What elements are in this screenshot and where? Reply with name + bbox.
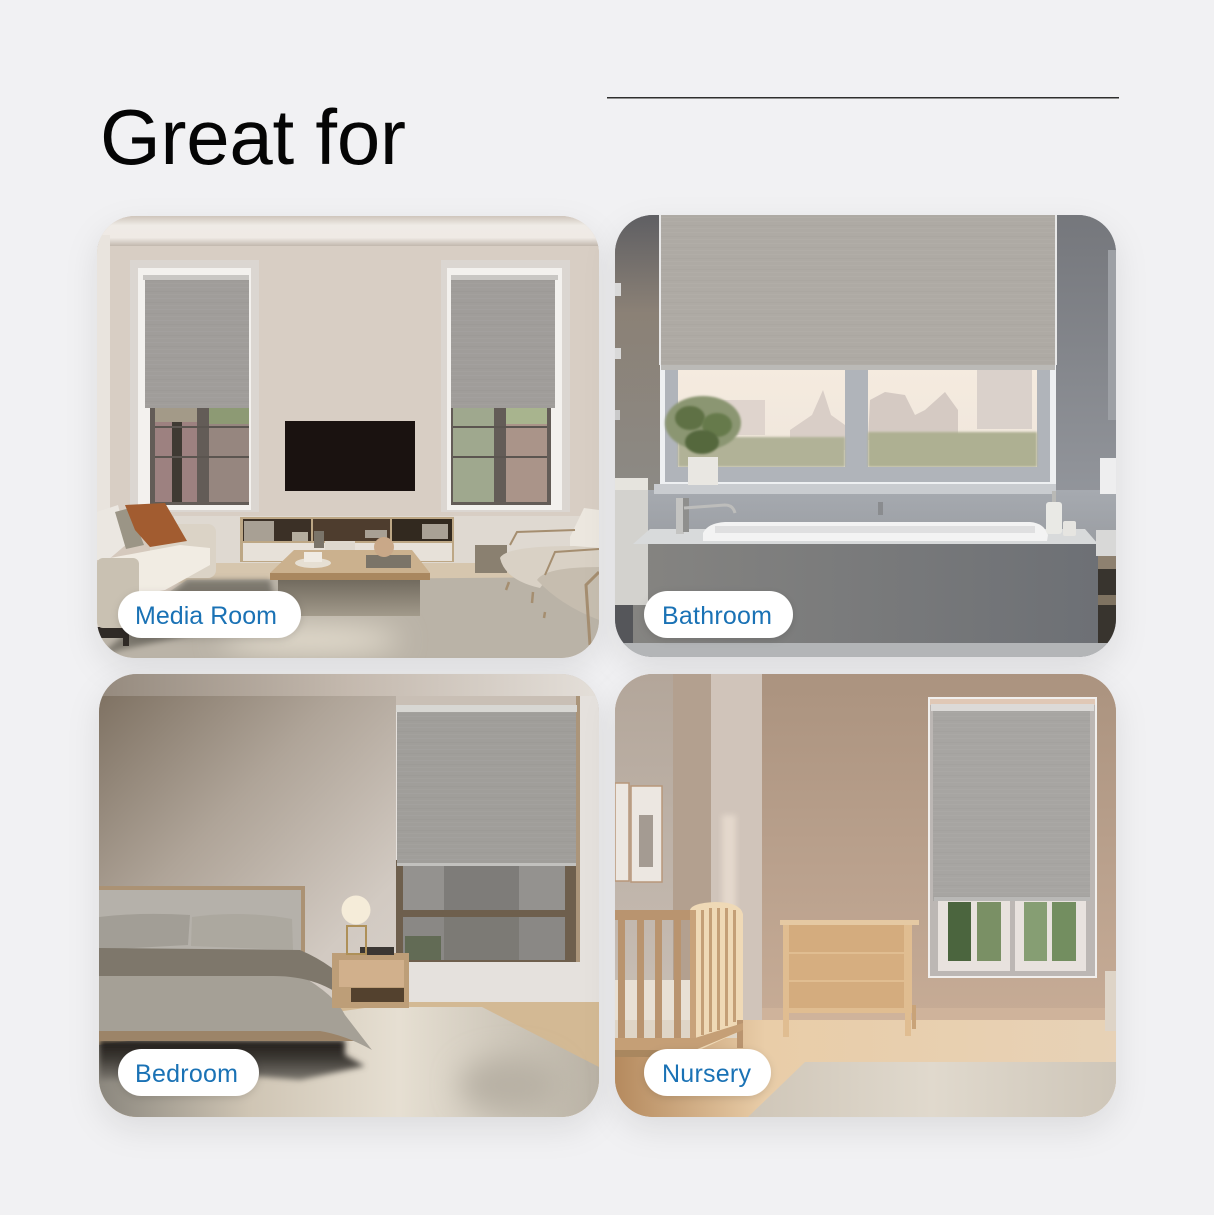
side shelf [1096, 250, 1116, 643]
coffee table [270, 531, 430, 616]
armchairs [500, 508, 599, 645]
right window [441, 260, 570, 512]
left wall [615, 215, 660, 495]
title: Great for [100, 93, 406, 181]
label: nursery: Nursery [662, 1060, 752, 1088]
wall [762, 674, 1116, 1024]
label: media room [118, 591, 301, 638]
cabinet [615, 478, 648, 645]
blanket [99, 948, 355, 1003]
label: nursery [644, 1049, 771, 1096]
soap bottles [1046, 491, 1076, 536]
rug [97, 577, 599, 658]
pillows [99, 914, 293, 950]
window trim [576, 696, 580, 962]
header rule [607, 97, 1119, 98]
panel: bathroom [615, 215, 1116, 657]
wall cabinets [174, 516, 580, 565]
panel: nursery [615, 674, 1116, 1117]
lamp [342, 896, 370, 954]
ceiling [99, 674, 599, 696]
bed frame [99, 1031, 355, 1041]
right wall [1056, 215, 1116, 495]
window frame [396, 860, 576, 962]
bathtub [703, 522, 1048, 541]
bin [1105, 971, 1116, 1031]
television [285, 421, 415, 491]
window [928, 697, 1097, 978]
rug shade [460, 1057, 560, 1113]
window view [403, 866, 565, 960]
stacked books [475, 545, 507, 573]
wall shelf hooks [615, 283, 621, 420]
rug [748, 1062, 1116, 1117]
left window [130, 260, 259, 512]
potted plant [665, 396, 741, 485]
label: bathroom: Bathroom [662, 602, 772, 630]
headboard [99, 886, 305, 952]
crib [615, 902, 743, 1057]
faucet [676, 498, 883, 534]
label: bedroom [118, 1049, 259, 1096]
side wall [97, 235, 110, 515]
dresser [780, 920, 919, 1037]
panel: bedroom [99, 674, 599, 1117]
roller shade [396, 705, 577, 866]
label: bathroom [644, 591, 793, 638]
tub deck [633, 529, 1098, 544]
column [673, 674, 762, 1024]
label: bedroom: Bedroom [135, 1060, 238, 1088]
window [654, 365, 1056, 494]
roller shade [659, 215, 1057, 370]
rug light patch [220, 628, 400, 652]
nightstand [332, 947, 409, 1008]
duvet [99, 975, 372, 1050]
baseboard [762, 1008, 1116, 1020]
back wall [110, 246, 599, 250]
label: media room: Media Room [135, 602, 277, 630]
rug [99, 1007, 599, 1117]
floor [615, 643, 1116, 657]
media console [240, 517, 454, 562]
lower wall [648, 490, 1116, 542]
floor [178, 563, 514, 583]
under-bed shadow [99, 1040, 365, 1080]
wall [99, 696, 396, 1006]
wall art [615, 783, 662, 882]
left wall [615, 674, 673, 1024]
roller shade [931, 704, 1094, 901]
rug shadow [97, 580, 278, 658]
floor [615, 1020, 1116, 1117]
alcove wall [396, 696, 599, 1006]
floor [99, 1002, 599, 1117]
panel: media room [97, 216, 599, 658]
tub base [633, 543, 1098, 644]
sofa [97, 503, 216, 646]
ceiling [97, 216, 599, 247]
